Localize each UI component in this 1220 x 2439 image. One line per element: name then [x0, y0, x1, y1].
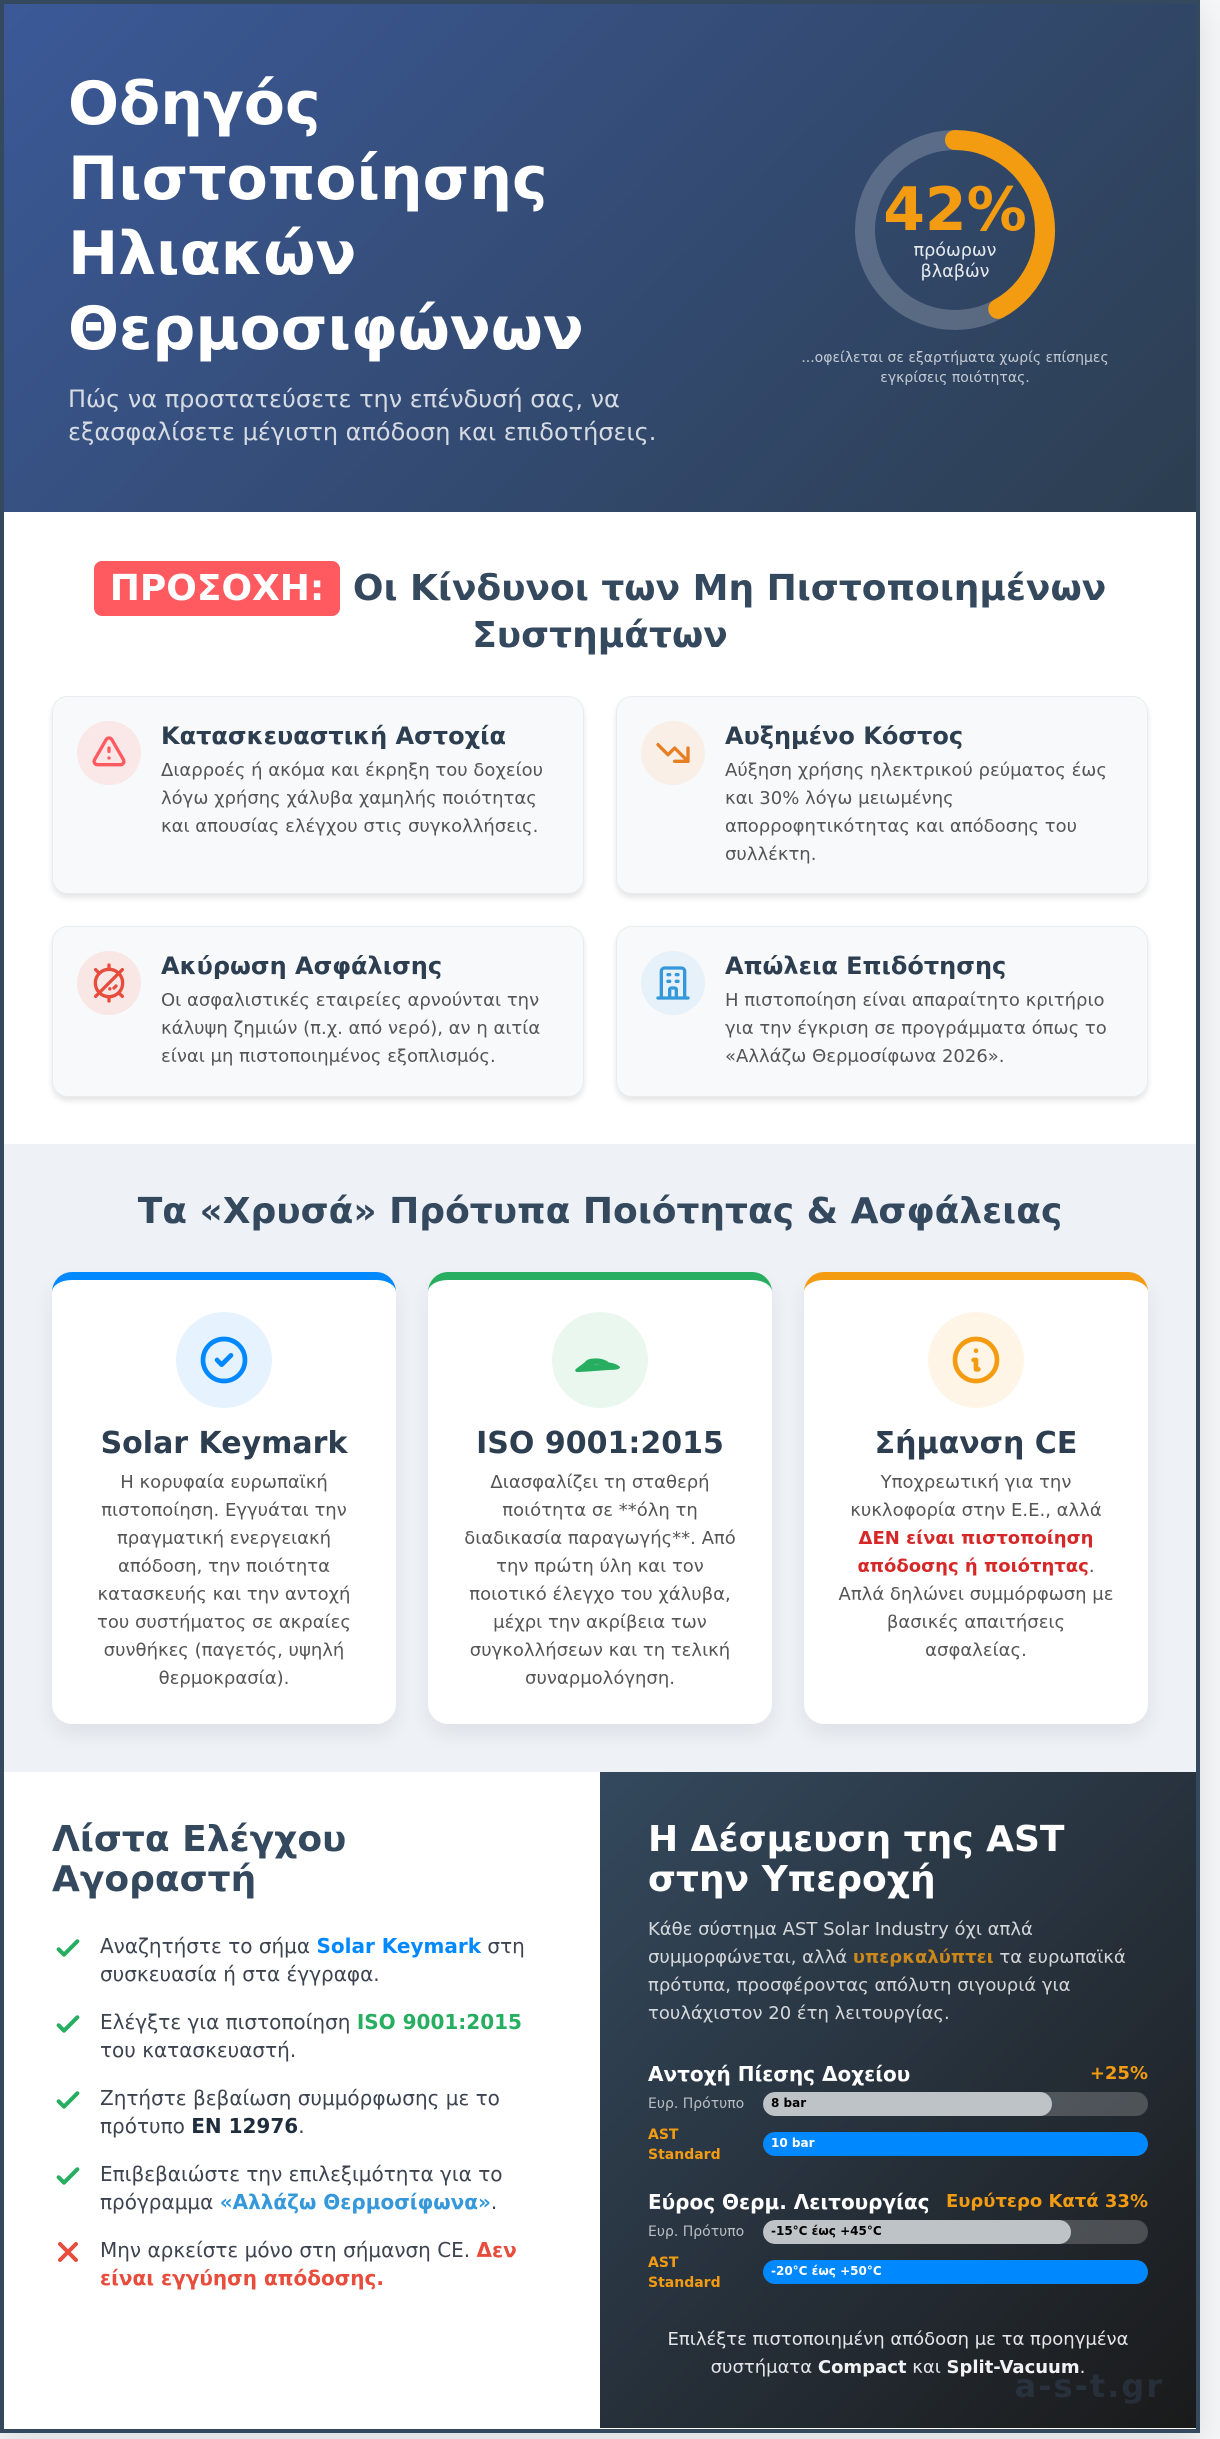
watermark: a-s-t.gr: [1015, 2367, 1164, 2405]
subtitle: εξασφαλίσετε μέγιστη απόδοση και επιδοτήσεις.: [68, 418, 656, 446]
card text: πραγματική ενεργειακή: [117, 1528, 331, 1549]
card text: και 30% λόγω μειωμένης: [725, 788, 954, 809]
checklist item 5: είναι εγγύηση απόδοσης.: [100, 2266, 384, 2290]
card text: κάλυψη ζημιών (π.χ. από νερό), αν η αιτία: [161, 1018, 540, 1039]
donut caption: ...οφείλεται σε εξαρτήματα χωρίς επίσημες: [801, 350, 1109, 366]
subtitle: [68, 385, 656, 446]
card text: θερμοκρασία).: [159, 1668, 289, 1689]
title: Ηλιακών: [68, 219, 356, 289]
heading: checklist: Αγοραστή: [52, 1859, 256, 1900]
panel: CE marking: [804, 1272, 1148, 1724]
title: Θερμοσιφώνων: [68, 294, 584, 364]
card text: για την έγκριση σε προγράμματα όπως το: [725, 1018, 1107, 1039]
card text: συνθήκες (παγετός, υψηλή: [104, 1640, 344, 1661]
checklist item 2: Ελέγξτε για πιστοποίηση ISO 9001:2015: [100, 2010, 522, 2034]
commitment text: [648, 1919, 1126, 2024]
donut label: [914, 241, 996, 282]
row label: Standard: [648, 2147, 721, 2163]
panel: AST commitment background: [600, 1772, 1196, 2428]
card text: διαδικασία παραγωγής**. Από: [464, 1528, 736, 1549]
card text: [464, 1472, 736, 1689]
card title: Κατασκευαστική Αστοχία: [161, 722, 506, 750]
row label: AST: [648, 2255, 678, 2271]
donut caption: [801, 350, 1109, 386]
checklist item 5: [100, 2238, 517, 2290]
panel: ISO 9001: [428, 1272, 772, 1724]
heading: AST commitment: στην Υπεροχή: [648, 1859, 936, 1900]
checklist item 5: Μην αρκείστε μόνο στη σήμανση CE. Δεν: [100, 2238, 517, 2262]
card title: Αυξημένο Κόστος: [725, 722, 963, 750]
checklist item 1: [100, 1934, 525, 1986]
heading: AST commitment: Η Δέσμευση της AST: [648, 1819, 1064, 1860]
card text: την πρώτη ύλη και τον: [496, 1556, 704, 1577]
heading: dangers: Συστημάτων: [472, 615, 728, 656]
subtitle: Πώς να προστατεύσετε την επένδυσή σας, να: [68, 385, 620, 413]
donut value: 42%: [883, 175, 1027, 245]
card text: Οι ασφαλιστικές εταιρείες αρνούνται την: [161, 990, 539, 1011]
row label: Standard: [648, 2275, 721, 2291]
title: [68, 69, 584, 364]
checklist item 3: Ζητήστε βεβαίωση συμμόρφωσης με το: [100, 2086, 500, 2110]
icon: check circle: [176, 1312, 272, 1408]
heading: dangers: ΠΡΟΣΟΧΗ:: [110, 568, 324, 609]
card text: [725, 760, 1107, 865]
card title: Ακύρωση Ασφάλισης: [161, 952, 442, 980]
card text: του συστήματος σε ακραίες: [97, 1612, 351, 1633]
commitment text: τουλάχιστον 20 έτη λειτουργίας.: [648, 2003, 950, 2024]
icon: info: [928, 1312, 1024, 1408]
bar: pressure EU: [763, 2092, 1148, 2116]
icon: trending down: [641, 721, 705, 785]
card text: Αύξηση χρήσης ηλεκτρικού ρεύματος έως: [725, 760, 1107, 781]
checklist item 2: [100, 2010, 522, 2062]
card text: Η κορυφαία ευρωπαϊκή: [120, 1472, 328, 1493]
checklist item 1: συσκευασία ή στα έγγραφα.: [100, 1962, 380, 1986]
card text: ΔΕΝ είναι πιστοποίηση: [859, 1528, 1093, 1549]
checklist item 4: [100, 2162, 502, 2214]
row label: [648, 2127, 721, 2163]
heading: dangers: [94, 561, 1106, 656]
card text: [97, 1472, 351, 1689]
commitment text: Κάθε σύστημα AST Solar Industry όχι απλά: [648, 1919, 1033, 1940]
bar: pressure EU: 8 bar: [771, 2096, 806, 2110]
panel: insurance void: [52, 926, 584, 1097]
closing text: Επιλέξτε πιστοποιημένη απόδοση με τα προηγμένα: [668, 2329, 1128, 2350]
card text: Η πιστοποίηση είναι απαραίτητο κριτήριο: [725, 990, 1105, 1011]
bar: temperature AST: [763, 2260, 1148, 2284]
donut caption: εγκρίσεις ποιότητας.: [880, 370, 1030, 386]
panel: construction failure: [52, 696, 584, 894]
card text: ποιοτικό έλεγχο του χάλυβα,: [469, 1584, 731, 1605]
row label: [648, 2255, 721, 2291]
card text: κυκλοφορία στην Ε.Ε., αλλά: [850, 1500, 1102, 1521]
check icon: [56, 2091, 80, 2109]
chart label: temperature: Εύρος Θερμ. Λειτουργίας: [648, 2190, 930, 2214]
title: Πιστοποίησης: [68, 144, 548, 214]
card text: είναι μη πιστοποιημένος εξοπλισμός.: [161, 1046, 496, 1067]
card text: μέχρι την ακρίβεια των: [493, 1612, 707, 1633]
card text: [838, 1472, 1113, 1661]
checklist item 4: πρόγραμμα «Αλλάζω Θερμοσίφωνα».: [100, 2190, 497, 2214]
panel: subsidy loss: [616, 926, 1148, 1097]
heading: checklist: Λίστα Ελέγχου: [52, 1819, 346, 1860]
checklist item 2: του κατασκευαστή.: [100, 2038, 296, 2062]
panel: buyer checklist background: [4, 1772, 600, 2428]
chart label: pressure: Αντοχή Πίεσης Δοχείου: [648, 2062, 910, 2086]
icon: building: [641, 951, 705, 1015]
card text: κατασκευής και την αντοχή: [98, 1584, 350, 1605]
donut label: πρόωρων: [914, 241, 996, 261]
card title: Απώλεια Επιδότησης: [725, 952, 1006, 980]
heading: checklist: [52, 1819, 346, 1900]
card title: Σήμανση CE: [875, 1426, 1077, 1461]
card title: Solar Keymark: [101, 1426, 347, 1461]
chart value: temperature: Ευρύτερο Κατά 33%: [946, 2191, 1148, 2212]
panel: increased cost: [616, 696, 1148, 894]
checklist item 1: Αναζητήστε το σήμα Solar Keymark στη: [100, 1934, 525, 1958]
panel: hero header: [4, 4, 1196, 512]
card text: βασικές απαιτήσεις: [887, 1612, 1065, 1633]
heading: AST commitment: [648, 1819, 1064, 1900]
icon: badge: [552, 1312, 648, 1408]
card text: συλλέκτη.: [725, 844, 816, 865]
row label: AST: [648, 2127, 678, 2143]
commitment text: συμμορφώνεται, αλλά υπερκαλύπτει τα ευρωπαϊκά: [648, 1947, 1126, 1968]
card text: και απουσίας ελέγχου στις συγκολλήσεις.: [161, 816, 538, 837]
cross icon: [58, 2242, 78, 2262]
title: Οδηγός: [68, 69, 321, 139]
card text: ποιότητα σε **όλη τη: [502, 1500, 698, 1521]
check icon: [56, 1939, 80, 1957]
chart value: pressure: +25%: [1090, 2063, 1148, 2084]
card text: [725, 990, 1107, 1067]
heading: gold standards: Τα «Χρυσά» Πρότυπα Ποιότητας & Ασφάλειας: [138, 1191, 1062, 1232]
card text: «Αλλάζω Θερμοσίφωνα 2026».: [725, 1046, 1005, 1067]
card text: συναρμολόγηση.: [525, 1668, 675, 1689]
bar: temperature AST: -20°C έως +50°C: [771, 2264, 882, 2278]
closing text: [668, 2329, 1128, 2378]
card text: απόδοσης ή ποιότητας.: [857, 1556, 1095, 1577]
row label: Ευρ. Πρότυπο: [648, 2096, 744, 2112]
card text: [161, 760, 543, 837]
commitment text: πρότυπα, προσφέροντας απόλυτη σιγουριά για: [648, 1975, 1070, 1996]
donut label: βλαβών: [920, 262, 990, 282]
check icon: [56, 2167, 80, 2185]
bar: temperature EU: -15°C έως +45°C: [771, 2224, 882, 2238]
bar: pressure AST: [763, 2132, 1148, 2156]
check icon: [56, 2015, 80, 2033]
donut chart: 42%: [855, 130, 1055, 330]
card text: Διασφαλίζει τη σταθερή: [490, 1472, 710, 1493]
bar: pressure AST: 10 bar: [771, 2136, 814, 2150]
card text: πιστοποίηση. Εγγυάται την: [101, 1500, 347, 1521]
card text: απόδοση, την ποιότητα: [118, 1556, 330, 1577]
heading: dangers: Οι Κίνδυνοι των Μη Πιστοποιημένων: [353, 568, 1106, 609]
icon: cancelled insurance: [77, 951, 141, 1015]
checklist item 3: [100, 2086, 500, 2138]
checklist item 4: Επιβεβαιώστε την επιλεξιμότητα για το: [100, 2162, 502, 2186]
card text: συγκολλήσεων και τη τελική: [470, 1640, 730, 1661]
closing text: συστήματα Compact και Split-Vacuum.: [711, 2357, 1085, 2378]
card text: απορροφητικότητας και απόδοσης του: [725, 816, 1077, 837]
icon: warning: [77, 721, 141, 785]
card text: ασφαλείας.: [925, 1640, 1027, 1661]
card text: [161, 990, 540, 1067]
row label: Ευρ. Πρότυπο: [648, 2224, 744, 2240]
card text: Απλά δηλώνει συμμόρφωση με: [839, 1584, 1113, 1605]
bar: temperature EU: [763, 2220, 1148, 2244]
card text: Υποχρεωτική για την: [881, 1472, 1071, 1493]
card text: λόγω χρήσης χάλυβα χαμηλής ποιότητας: [161, 788, 537, 809]
card title: ISO 9001:2015: [476, 1426, 724, 1461]
panel: gold standards background: [4, 1144, 1196, 1772]
checklist item 3: πρότυπο EN 12976.: [100, 2114, 305, 2138]
card text: Διαρροές ή ακόμα και έκρηξη του δοχείου: [161, 760, 543, 781]
panel: Solar Keymark: [52, 1272, 396, 1724]
